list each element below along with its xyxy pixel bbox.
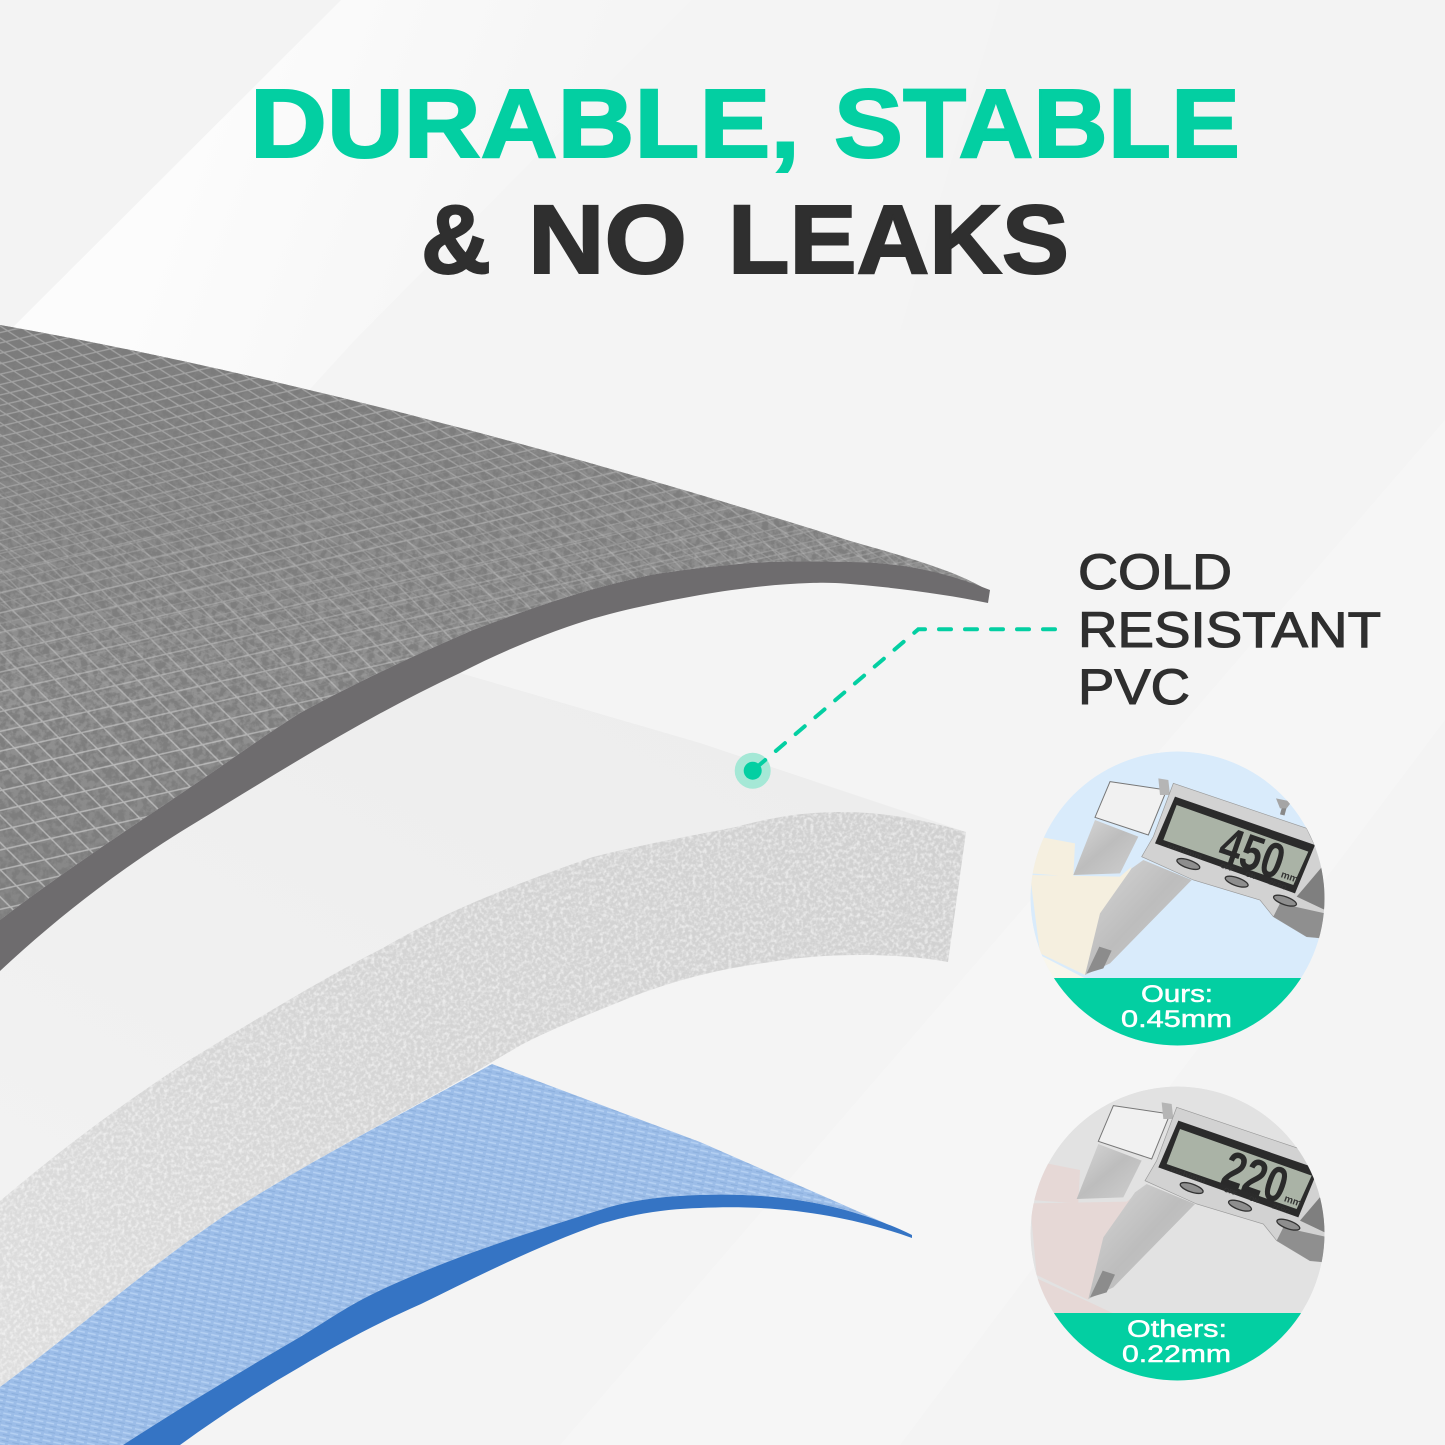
marker dot [744, 762, 762, 780]
caliper: ZERO [1268, 879, 1287, 892]
result band: Ours: [1141, 981, 1213, 1008]
title line 2: no leaks [421, 185, 1069, 294]
layer: foam core [0, 800, 970, 1400]
dashed leader line [753, 629, 1055, 771]
result band [1054, 978, 1301, 1046]
caliper: OFF [1219, 863, 1234, 874]
caliper [1077, 1102, 1328, 1299]
result band: 0.22mm [1122, 1341, 1231, 1368]
callout: cold resistant PVC pointer [735, 629, 1055, 789]
layer: blue base [0, 1064, 912, 1445]
callout label: PVC [1078, 659, 1190, 715]
caliper: ON [1244, 871, 1256, 881]
blue edge [123, 1195, 912, 1445]
title line 1: durable, stable: STABLE [834, 69, 1240, 178]
title line 2: no leaks: NO [528, 185, 687, 294]
marker halo [735, 753, 771, 789]
sample material [1032, 1164, 1130, 1313]
title line 1: durable, stable: DURABLE, [250, 69, 800, 178]
callout label: COLD [1078, 544, 1232, 600]
callout label [1078, 544, 1381, 715]
caliper: inch/mm [1166, 843, 1203, 861]
caliper [1073, 778, 1325, 975]
caliper: inch/mm [1169, 1167, 1206, 1185]
comparison circle: others 0.22mm [1030, 1086, 1328, 1383]
caliper: mm [1283, 1193, 1303, 1210]
result band: Others: [1127, 1316, 1227, 1343]
title line 2: no leaks: & [421, 185, 491, 294]
title line 2: no leaks: LEAKS [728, 185, 1069, 294]
caliper: ZERO [1271, 1203, 1291, 1216]
caliper: ON [1248, 1195, 1260, 1205]
title [250, 69, 1240, 294]
caliper: OFF [1223, 1187, 1238, 1198]
title line 1: durable, stable [250, 69, 1240, 178]
layer: grey mesh top [0, 300, 1000, 971]
sample material [1030, 835, 1132, 983]
layer: white cold resistant PVC surface [0, 673, 966, 1201]
caliper: mm [1279, 869, 1300, 886]
callout label: RESISTANT [1078, 602, 1381, 658]
result band [1054, 1313, 1301, 1380]
comparison circle: ours 0.45mm [1030, 752, 1325, 1048]
caliper: 220 [1216, 1140, 1295, 1214]
result band: 0.45mm [1121, 1006, 1232, 1033]
grey edge [0, 561, 990, 971]
layered material diagram [0, 300, 1000, 1445]
caliper: 450 [1212, 816, 1292, 890]
